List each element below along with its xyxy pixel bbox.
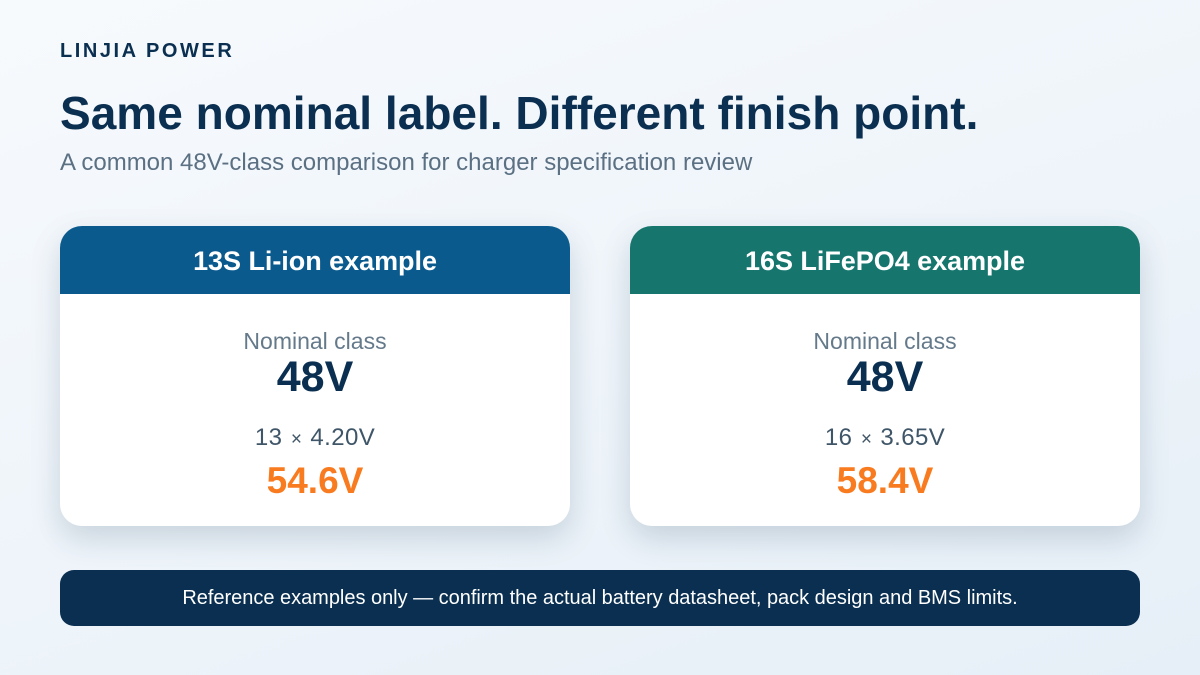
- panel heading: 16S LiFePO4: [630, 226, 1140, 294]
- footer disclaimer banner: [60, 570, 1140, 626]
- cell calculation: 13 4.20V: [255, 424, 375, 451]
- panel: 16S LiFePO4 example: [630, 226, 1140, 526]
- panel heading: 13S Li-ion: [60, 226, 570, 294]
- brand label: LINJIA POWER: [60, 40, 234, 62]
- cell calculation: ×: [861, 429, 872, 450]
- panel heading: 16S LiFePO4: 16S LiFePO4 example: [745, 246, 1025, 276]
- cell calculation: ×: [291, 429, 302, 450]
- nominal class label: Nominal class: [813, 328, 957, 354]
- panel heading: 13S Li-ion: 13S Li-ion example: [193, 246, 437, 276]
- subtitle: A common 48V-class comparison for charger specification review: [60, 149, 752, 176]
- nominal class label: Nominal class: [243, 328, 387, 354]
- panel: 13S Li-ion example: [60, 226, 570, 526]
- footer disclaimer banner: Reference examples only — confirm the actual battery datasheet, pack design and BMS limits.: [182, 587, 1018, 609]
- finish voltage: 54.6V: [267, 460, 363, 501]
- finish voltage: 58.4V: [837, 460, 933, 501]
- nominal voltage: 48V: [847, 353, 923, 401]
- nominal voltage: 48V: [277, 353, 353, 401]
- title: Same nominal label. Different finish point.: [60, 87, 978, 139]
- cell calculation: 16 3.65V: [825, 424, 945, 451]
